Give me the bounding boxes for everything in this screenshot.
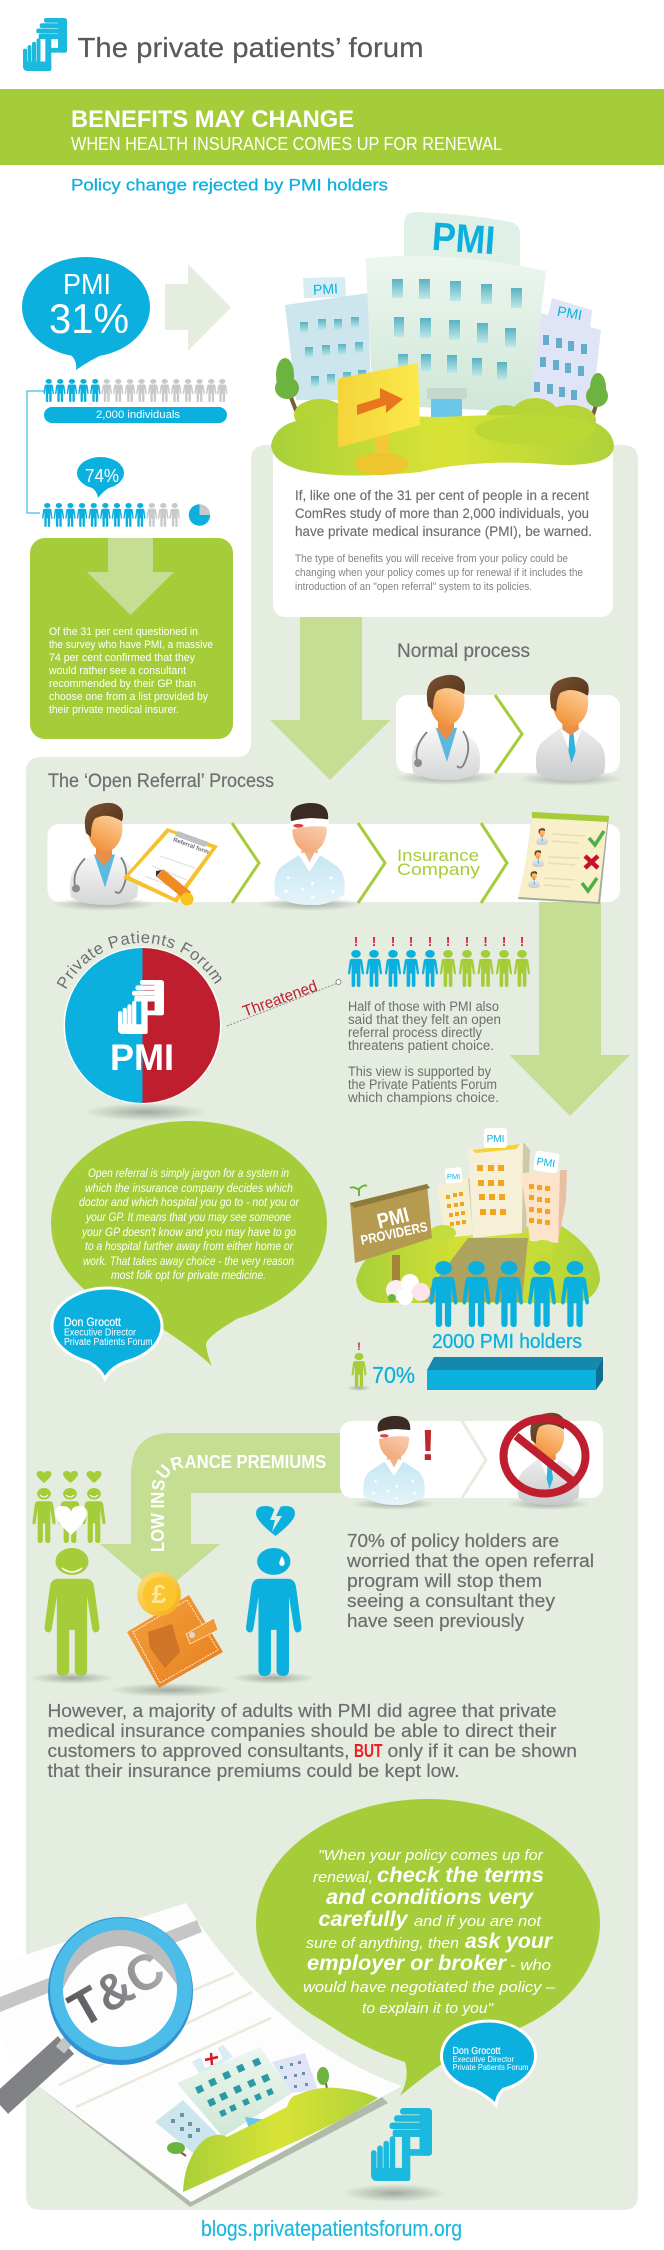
connector line bbox=[27, 391, 44, 513]
icon: patient bbox=[274, 803, 345, 905]
text: half of those with PMI: Half of those with PMI also bbox=[348, 999, 499, 1014]
right tower: PMI bbox=[536, 1156, 556, 1170]
text: half of those with PMI: the Private Patients Forum bbox=[348, 1077, 497, 1092]
icon: large happy person bbox=[30, 1548, 114, 1684]
people row: half threatened bbox=[348, 934, 530, 987]
pale green background panel bbox=[26, 445, 638, 2210]
pill: 2,000 individuals: 2,000 individuals bbox=[96, 409, 181, 421]
speech bubble: open referral quote: which the insurance company decides which bbox=[85, 1183, 293, 1195]
pill: 2,000 individuals bbox=[44, 407, 227, 423]
right building: PMI bbox=[556, 303, 583, 323]
panel: 74 per cent text box: Of the 31 per cent questioned in bbox=[49, 626, 198, 638]
icon: blocked consultant bbox=[504, 1413, 586, 1505]
pie chart: 74% bbox=[189, 504, 210, 526]
people row: half threatened: ! bbox=[372, 934, 376, 949]
icon: referral clipboard bbox=[123, 828, 218, 906]
text: however majority of adults: customers to approved consultants, bbox=[48, 1741, 350, 1761]
right tower bbox=[521, 1150, 567, 1243]
illustration: PMI providers bbox=[350, 1128, 600, 1327]
arrow: chevron 1 bbox=[232, 823, 259, 903]
card: warning text: have private medical insurance (PMI), be warned. bbox=[295, 524, 592, 539]
speech bubble: check the terms: sure of anything, then bbox=[306, 1935, 459, 1952]
text: half of those with PMI: said that they felt an open bbox=[348, 1012, 501, 1027]
speech bubble: open referral quote: Open referral is simply jargon for a system in bbox=[88, 1168, 289, 1180]
speech bubble: check the terms: "When your policy comes up for bbox=[318, 1847, 544, 1864]
illustration: terms document with hospital bbox=[0, 1903, 402, 2207]
arrow: chevron 3 bbox=[481, 823, 507, 903]
icon: green person with exclamation bbox=[347, 1341, 371, 1391]
people row: 2,000 individuals bbox=[44, 379, 228, 402]
direction sign bbox=[338, 363, 420, 475]
footer logo with shadow bbox=[342, 2108, 446, 2202]
hill and path bbox=[356, 1225, 600, 1303]
panel: 74 per cent text box: 74 per cent confirmed that they bbox=[49, 652, 195, 664]
label: 2000 PMI holders: 2000 PMI holders bbox=[432, 1331, 582, 1353]
speech bubble: open referral quote: work. That takes away choice - the very reason bbox=[83, 1256, 294, 1268]
exclamation: ! bbox=[421, 1421, 435, 1470]
text: half of those with PMI: which champions choice. bbox=[347, 1090, 499, 1105]
card: warning text: changing when your policy comes up for renewal if it includes the bbox=[295, 567, 583, 579]
speech bubble: check the terms bbox=[256, 1799, 600, 2096]
speech bubble: Don Grocott: Private Patients Forum bbox=[64, 1337, 152, 1348]
speech bubble: open referral quote: most folk opt for private medicine. bbox=[111, 1270, 266, 1282]
label: 70%: 70% bbox=[372, 1362, 415, 1388]
heading: Normal process: Normal process bbox=[397, 641, 530, 662]
label: insurance company: Insurance bbox=[397, 846, 479, 865]
people row: half threatened: ! bbox=[520, 934, 524, 949]
panel: 74 per cent text box: their private medical insurer. bbox=[49, 704, 179, 716]
arrow: second down bbox=[510, 880, 630, 1116]
icon: doctor bbox=[412, 675, 480, 780]
speech bubble: check the terms: carefully bbox=[318, 1908, 409, 1931]
card: warning text: ComRes study of more than 2,000 individuals, you bbox=[295, 506, 589, 521]
middle tower: PMI bbox=[487, 1134, 504, 1145]
trees bbox=[275, 358, 608, 425]
heading: Open Referral process: The ‘Open Referral’ Process bbox=[48, 771, 274, 792]
text: 70% of policy holders: have seen previously bbox=[347, 1611, 524, 1631]
speech bubble: Don Grocott second: Private Patients Forum bbox=[452, 2062, 528, 2072]
speech bubble: check the terms: employer or broker bbox=[307, 1952, 508, 1975]
providers signboard: PMI bbox=[375, 1203, 411, 1234]
title band: BENEFITS MAY CHANGE bbox=[71, 106, 354, 133]
PMI 31% bubble: 31% bbox=[49, 295, 129, 342]
icon: checklist bbox=[518, 812, 609, 904]
people row: half threatened: ! bbox=[502, 934, 506, 949]
panel: 74 per cent text box: the survey who have PMI, a massive bbox=[49, 639, 213, 651]
bushes bbox=[430, 1225, 456, 1241]
icon: consultant bbox=[536, 677, 605, 781]
text: half of those with PMI: referral process directly bbox=[348, 1025, 482, 1040]
people row: half threatened: ! bbox=[465, 934, 469, 949]
card: warning text: The type of benefits you will receive from your policy could be bbox=[295, 553, 568, 565]
left tower: PMI bbox=[447, 1172, 460, 1181]
arrow: chevron 2 bbox=[358, 823, 385, 903]
text: half of those with PMI: This view is supported by bbox=[348, 1064, 491, 1079]
title band: WHEN HEALTH INSURANCE COMES UP FOR RENEWAL bbox=[71, 133, 502, 154]
label: Threatened with dotted line bbox=[227, 978, 341, 1026]
card: warning text: introduction of an "open referral" system to its policies. bbox=[295, 581, 532, 593]
people row: half threatened: ! bbox=[354, 934, 358, 949]
footer url: blogs.privatepatientsforum.org bbox=[201, 2216, 462, 2241]
text: however majority of adults: BUT bbox=[354, 1741, 382, 1761]
card: normal process bbox=[394, 675, 623, 786]
text: 70% of policy holders: 70% of policy holders are bbox=[347, 1531, 559, 1551]
left building bbox=[285, 277, 371, 400]
people row: half threatened: ! bbox=[428, 934, 432, 949]
central building bbox=[366, 212, 546, 419]
panel: 74 per cent text box: choose one from a list provided by bbox=[49, 691, 208, 703]
icon: wallet with pound coin bbox=[108, 1572, 232, 1697]
left building: PMI bbox=[313, 280, 338, 298]
speech bubble: open referral quote: to a hospital further away from either home or bbox=[85, 1241, 294, 1253]
speech bubble: open referral quote: doctor and which hospital you go to - not you or bbox=[79, 1197, 300, 1209]
speech bubble: open referral quote bbox=[51, 1121, 327, 1366]
speech bubble: check the terms: and if you are not bbox=[414, 1913, 542, 1930]
speech bubble: check the terms: to explain it to you" bbox=[362, 2000, 494, 2017]
speech bubble: check the terms: renewal, bbox=[313, 1869, 373, 1886]
arrow: large down bbox=[270, 617, 390, 780]
text: however majority of adults: only if it can be shown bbox=[388, 1741, 577, 1761]
emblem: Private Patients Forum and PMI split circle: PMI bbox=[110, 1037, 174, 1078]
group: happy people bbox=[32, 1471, 106, 1543]
people row: half threatened: ! bbox=[446, 934, 450, 949]
icon: referral clipboard: Referral form bbox=[172, 837, 210, 856]
74% bubble bbox=[77, 457, 124, 498]
speech bubble: check the terms: - who bbox=[510, 1957, 551, 1974]
label: Threatened with dotted line: Threatened bbox=[241, 978, 320, 1021]
arrow: chevron bbox=[495, 695, 522, 773]
icon: magnifying glass with T&C: T&C bbox=[59, 1940, 174, 2038]
text: half of those with PMI bbox=[347, 999, 501, 1105]
speech bubble: open referral quote: your GP. It means that you may see someone bbox=[85, 1212, 291, 1224]
left tower bbox=[437, 1167, 480, 1238]
middle tower bbox=[468, 1128, 530, 1238]
people row: half threatened: ! bbox=[483, 934, 488, 949]
label: insurance company bbox=[397, 846, 481, 879]
speech bubble: Don Grocott: Don Grocott bbox=[64, 1317, 122, 1329]
arrow: low insurance premiums: LOW INSURANCE PREMIUMS bbox=[151, 1455, 326, 1551]
small hospital bbox=[155, 2045, 378, 2192]
flowers bbox=[386, 1274, 430, 1305]
icon: wallet with pound coin: £ bbox=[152, 1579, 167, 1609]
icon: sad person with broken heart bbox=[232, 1506, 316, 1684]
text: however majority of adults: However, a majority of adults with PMI did agree that private bbox=[48, 1701, 556, 1721]
card: warning text: If, like one of the 31 per cent of people in a recent bbox=[295, 488, 589, 503]
panel: 74 per cent text box: recommended by their GP than bbox=[49, 678, 196, 690]
right building bbox=[529, 298, 601, 420]
label: insurance company: Company bbox=[397, 860, 481, 879]
people row: half threatened: ! bbox=[391, 934, 395, 949]
text: 70% of policy holders bbox=[346, 1531, 594, 1631]
providers signboard bbox=[350, 1184, 432, 1283]
speech bubble: open referral quote: your GP doesn't know and you may have to go bbox=[81, 1227, 297, 1239]
text: 70% of policy holders: seeing a consultant they bbox=[347, 1591, 555, 1611]
five blue people bbox=[430, 1261, 589, 1327]
panel: 74 per cent text box: would rather see a consultant bbox=[48, 665, 186, 677]
central building: PMI bbox=[431, 215, 497, 263]
74% bubble: 74% bbox=[85, 466, 119, 486]
curved label: Private Patients Forum bbox=[56, 931, 222, 989]
speech bubble: Don Grocott: Executive Director bbox=[64, 1328, 137, 1338]
arrow: pale right bbox=[165, 264, 231, 351]
emblem: Private Patients Forum and PMI split circle bbox=[56, 931, 222, 1120]
card: warning text bbox=[273, 435, 613, 617]
people row: 74% bbox=[42, 503, 180, 527]
icon: patient bbox=[363, 1416, 425, 1505]
organisation name: The private patients’ forum bbox=[78, 32, 424, 63]
speech bubble: check the terms: ask your bbox=[465, 1930, 554, 1953]
text: however majority of adults: medical insurance companies should be able to direct their bbox=[48, 1721, 557, 1741]
speech bubble: Don Grocott second: Don Grocott bbox=[452, 2046, 501, 2057]
speech bubble: Don Grocott second bbox=[441, 2021, 536, 2105]
card: patient and blocked consultant bbox=[340, 1413, 603, 1510]
illustration: PMI hospital buildings bbox=[271, 212, 614, 476]
speech bubble: Don Grocott second: Executive Director bbox=[452, 2054, 514, 2064]
speech bubble: Don Grocott bbox=[52, 1288, 162, 1379]
arrow: low insurance premiums bbox=[100, 1433, 342, 1581]
text: however majority of adults bbox=[48, 1701, 577, 1781]
icon: magnifying glass with T&C bbox=[0, 1917, 193, 2105]
PMI 31% bubble bbox=[22, 257, 150, 370]
speech bubble: check the terms: check the terms bbox=[377, 1864, 544, 1887]
green hill bbox=[271, 398, 614, 476]
icon: doctor bbox=[70, 803, 138, 905]
text: 70% of policy holders: program will stop them bbox=[347, 1571, 542, 1591]
PMI 31% bubble: PMI bbox=[63, 269, 111, 301]
subtitle: Policy change rejected by PMI holders bbox=[71, 176, 388, 195]
providers signboard: PROVIDERS bbox=[359, 1219, 429, 1248]
icon: green person with exclamation: ! bbox=[357, 1341, 361, 1353]
card: open referral process bbox=[48, 803, 620, 911]
bar: 70% of 2000 bbox=[427, 1357, 603, 1390]
text: 70% of policy holders: worried that the open referral bbox=[346, 1551, 594, 1571]
speech bubble: check the terms: would have negotiated the policy – bbox=[303, 1979, 556, 1996]
title band bbox=[0, 89, 664, 165]
panel: 74 per cent text box bbox=[30, 538, 233, 739]
text: however majority of adults: that their insurance premiums could be kept low. bbox=[48, 1761, 460, 1781]
header logo bbox=[23, 18, 67, 71]
text: half of those with PMI: threatens patient choice. bbox=[348, 1038, 494, 1053]
people row: half threatened: ! bbox=[409, 934, 413, 949]
speech bubble: check the terms: and conditions very bbox=[326, 1886, 534, 1909]
